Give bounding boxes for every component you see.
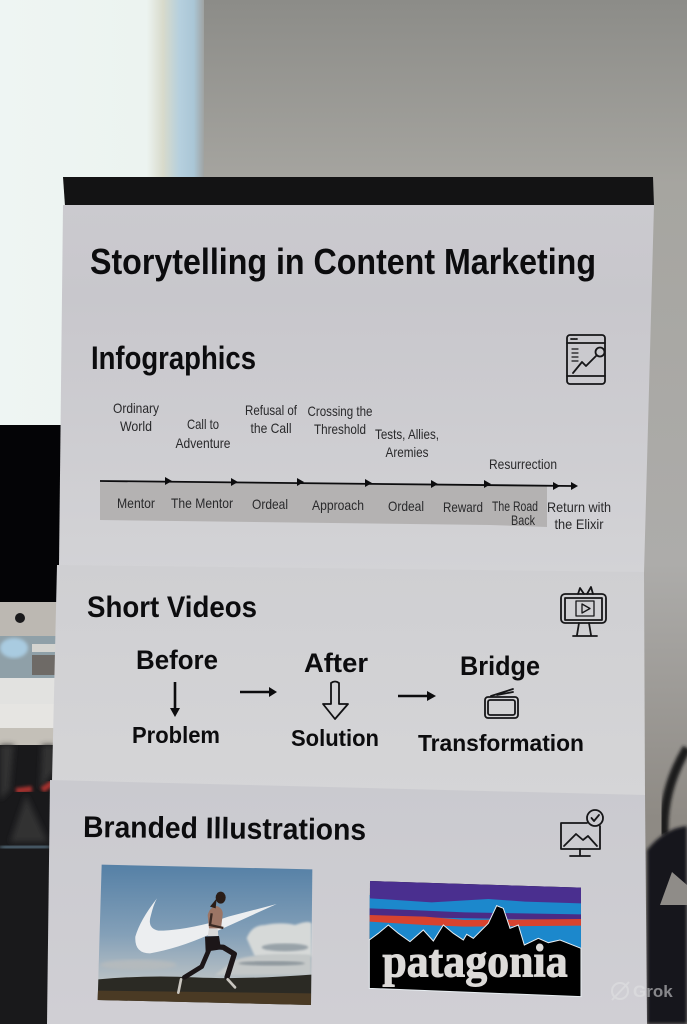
ground [98, 975, 311, 1005]
arrow: before to after [240, 687, 277, 697]
top stage labels [113, 400, 557, 472]
bottom stage labels: The Road [492, 498, 538, 514]
step: bridge / transformation: Transformation [418, 730, 584, 756]
bottom stage labels: Return with [547, 499, 611, 515]
step: after / solution: Solution [291, 725, 379, 751]
step: after / solution: After [304, 648, 368, 678]
heading: Branded Illustrations: Branded Illustrations [83, 811, 366, 847]
step: bridge / transformation [418, 651, 584, 756]
top stage labels: World [120, 418, 152, 434]
bottom stage labels: The Mentor [171, 495, 233, 511]
icon: monitor with badge [561, 810, 603, 856]
nike swoosh [135, 898, 277, 953]
top stage labels: the Call [250, 420, 292, 436]
timeline band [100, 482, 547, 527]
top stage labels: Resurrection [489, 456, 557, 472]
panel: short videos [52, 565, 645, 796]
step: bridge / transformation: Bridge [460, 651, 540, 681]
watermark: Grok [612, 982, 673, 1001]
top stage labels: Crossing the [308, 403, 373, 419]
watermark: Grok: Grok [633, 982, 673, 1001]
image: runner with swoosh [98, 865, 312, 1005]
image: patagonia logo [369, 881, 581, 997]
timeline arrow [100, 477, 578, 490]
heading: Infographics: Infographics [91, 340, 256, 376]
panel: infographics [59, 205, 654, 573]
top stage labels: Refusal of [245, 402, 297, 418]
panel: branded illustrations [47, 780, 647, 1024]
bottom stage labels: Reward [443, 499, 483, 515]
step: after / solution [291, 648, 379, 751]
title: Storytelling in Content Marketing [90, 241, 596, 282]
clouds [100, 922, 312, 975]
flipchart top bar [63, 177, 654, 206]
top stage labels: Call to [187, 416, 219, 432]
heading: Short Videos: Short Videos [87, 591, 257, 624]
step: before / problem: Before [136, 645, 218, 675]
bottom stage labels: Back [511, 512, 536, 528]
icon: radio [485, 689, 518, 718]
icon: video screen [561, 587, 606, 636]
icon: browser window with chart [567, 335, 605, 384]
background: computer monitor and desk [0, 425, 62, 1024]
step: before / problem: Problem [132, 722, 220, 748]
top stage labels: Ordinary [113, 400, 159, 416]
bottom stage labels: Ordeal [388, 498, 424, 514]
mountain silhouette [369, 906, 581, 997]
runner [178, 943, 235, 993]
patagonia wordmark: patagonia [382, 936, 568, 988]
step: before / problem [132, 645, 220, 748]
top stage labels: Aremies [386, 444, 428, 460]
top stage labels: Tests, Allies, [375, 426, 439, 442]
background: chair [647, 748, 687, 1024]
bottom stage labels: the Elixir [554, 516, 604, 532]
bottom stage labels [117, 495, 611, 532]
bottom stage labels: Ordeal [252, 496, 288, 512]
arrow: after to bridge [398, 691, 436, 701]
top stage labels: Adventure [176, 435, 231, 451]
top stage labels: Threshold [314, 421, 366, 437]
bottom stage labels: Mentor [117, 495, 155, 511]
bottom stage labels: Approach [312, 497, 364, 513]
